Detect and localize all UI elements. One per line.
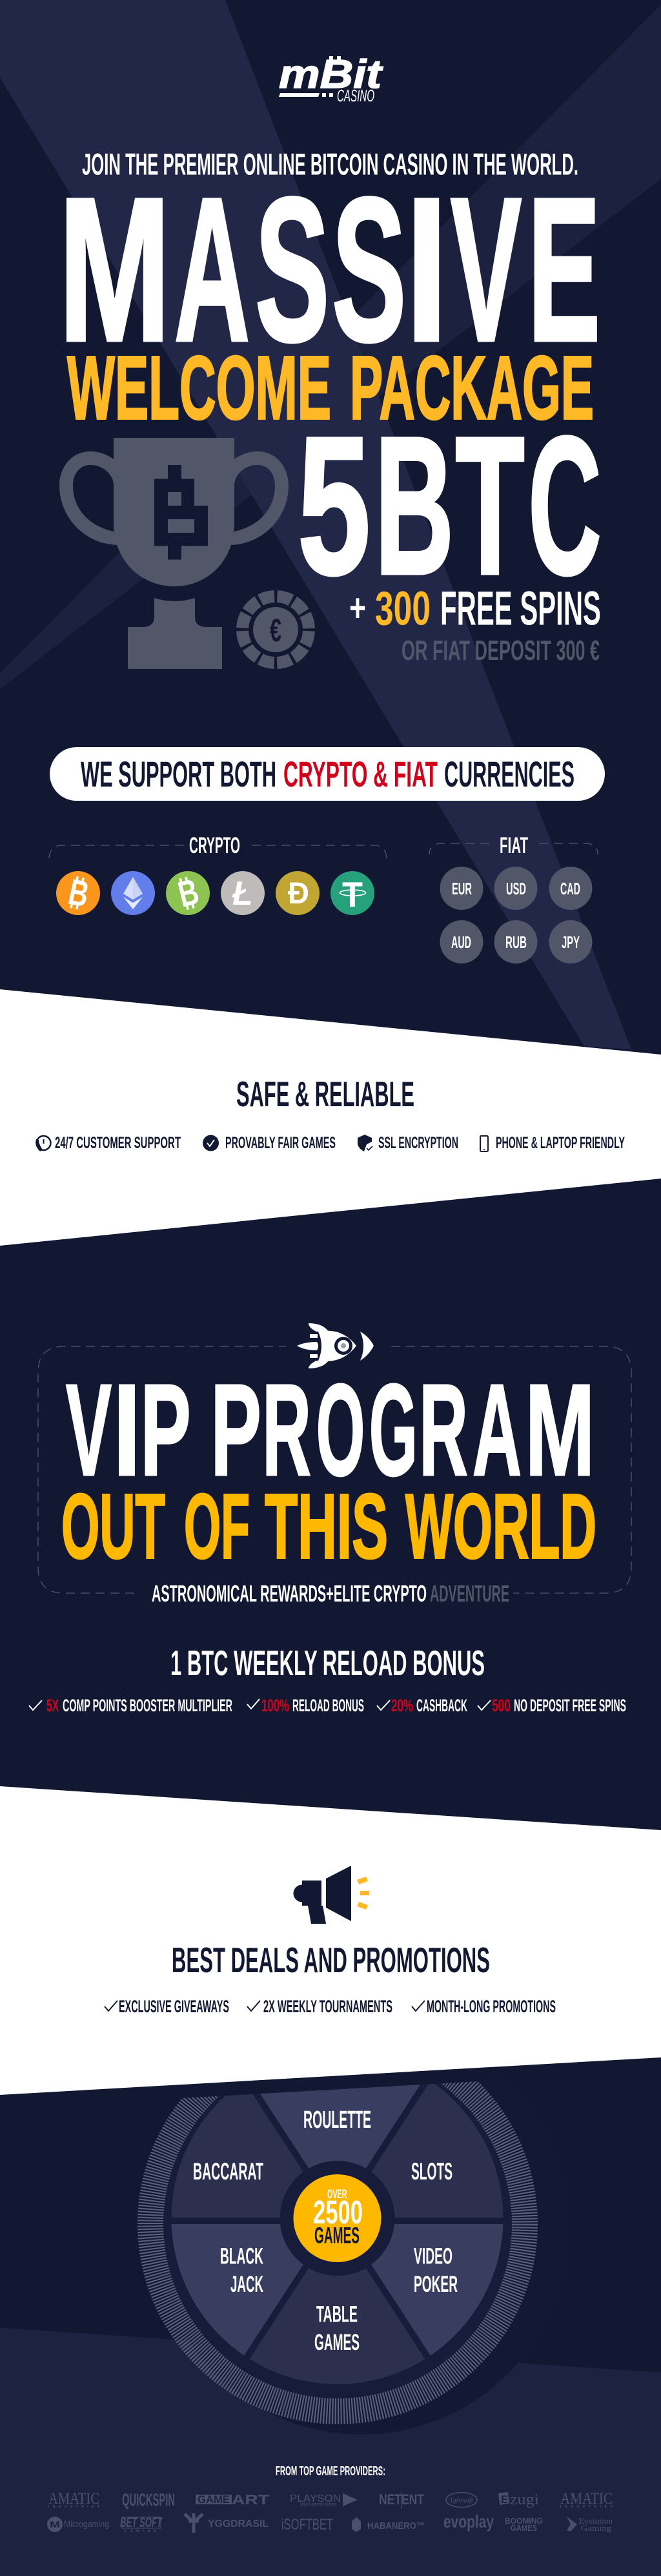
- logos: game providers: Igrosoft: [449, 2497, 474, 2504]
- heading: VIP program: G: [369, 1357, 418, 1503]
- logos: game providers: HABANERO™: [367, 2520, 425, 2531]
- panel: crypto: CRYPTO: [189, 833, 240, 858]
- feature row: VIP perks: 100%: [261, 1696, 289, 1715]
- logos: game providers: Gaming: [581, 2523, 612, 2533]
- feature row: safe and reliable: 24/7 CUSTOMER SUPPORT: [55, 1134, 181, 1152]
- icon: ethereum: [111, 871, 155, 915]
- icon: euro chip: €: [270, 612, 281, 648]
- free spins line: +: [349, 586, 366, 630]
- heading: massive: S: [332, 156, 406, 384]
- heading: 5BTC: 5: [298, 397, 371, 615]
- feature row: safe and reliable: [36, 1134, 625, 1152]
- heading: massive: M: [59, 156, 170, 384]
- pill: currencies banner: CRYPTO & FIAT: [283, 754, 438, 794]
- logos: game providers: YGGDRASIL: [208, 2519, 269, 2530]
- logos: game providers: GAME: [198, 2493, 230, 2506]
- panel: fiat: FIAT: [500, 833, 528, 858]
- heading: 5BTC: B: [375, 397, 454, 615]
- heading: out of this world: OUT: [61, 1475, 165, 1578]
- heading: VIP program: P: [141, 1357, 190, 1503]
- logos: game providers: M: [50, 2519, 60, 2530]
- heading: VIP program: A: [473, 1357, 522, 1503]
- feature row: VIP perks: RELOAD BONUS: [292, 1696, 364, 1715]
- chart: game wheel: BACCARAT: [193, 2158, 263, 2185]
- feature row: VIP perks: 500: [492, 1696, 511, 1715]
- chart: game wheel: [137, 2081, 538, 2435]
- panel: fiat: EUR: [452, 879, 472, 898]
- chart: game wheel: JACK: [230, 2272, 263, 2297]
- chart: game wheel: POKER: [414, 2272, 458, 2297]
- logos: game providers: QUICKSPIN: [122, 2490, 175, 2509]
- heading: VIP program: I: [113, 1357, 141, 1503]
- heading: VIP program: P: [210, 1357, 261, 1503]
- free spins line: [349, 581, 601, 635]
- panel: fiat: JPY: [562, 933, 580, 952]
- heading: 5BTC: T: [455, 397, 525, 615]
- icon: phone: [480, 1136, 488, 1151]
- feature row: VIP perks: 5X: [46, 1696, 59, 1715]
- icon: verified badge: [203, 1135, 219, 1151]
- logos: game providers: zugi: [510, 2491, 539, 2508]
- chart: game wheel: BLACK: [220, 2243, 263, 2269]
- logos: game providers: ART: [232, 2493, 269, 2508]
- white band: safe and reliable background: [0, 989, 661, 1246]
- icon: litecoin: Ł: [232, 875, 253, 912]
- logos: game providers: AMATIC: [48, 2490, 99, 2508]
- bottom lighter panel: [0, 2327, 661, 2576]
- logos: game providers: E: [501, 2493, 508, 2506]
- feature row: VIP perks: 20%: [391, 1696, 413, 1715]
- dashed frame: VIP: [38, 1346, 631, 1593]
- heading: massive: S: [255, 156, 329, 384]
- chart: game wheel: OVER: [327, 2188, 347, 2201]
- panel: fiat: CAD: [560, 879, 580, 898]
- icon: trophy with bitcoin: [59, 438, 289, 669]
- logos: game providers: GAMING: [124, 2530, 156, 2533]
- icon: litecoin: [221, 871, 265, 915]
- icon: bitcoin cash: B: [174, 871, 203, 914]
- heading: massive: V: [451, 156, 522, 384]
- icon: tether: T: [342, 874, 363, 914]
- icon: bitcoin: B: [65, 871, 92, 915]
- subtitle: rewards: ASTRONOMICAL REWARDS+ELITE CRYPTO: [152, 1580, 427, 1607]
- icon: dogecoin: Ð: [288, 876, 309, 910]
- heading: safe and reliable: SAFE & RELIABLE: [236, 1074, 414, 1114]
- chart: game wheel: 2500: [313, 2194, 363, 2231]
- icon: tether: [330, 871, 374, 915]
- feature row: VIP perks: COMP POINTS BOOSTER MULTIPLIER: [63, 1696, 232, 1715]
- background light ray: main diagonal: [0, 0, 631, 1049]
- heading: VIP program: R: [262, 1357, 311, 1503]
- logos: game providers: [47, 2490, 613, 2533]
- panel: fiat: RUB: [505, 933, 527, 952]
- feature row: VIP perks: [29, 1696, 626, 1715]
- heading: VIP program: V: [66, 1357, 112, 1503]
- logos: game providers: Microgaming: [64, 2519, 109, 2529]
- white band: deals background: [0, 1786, 661, 2095]
- pill: currencies banner: WE SUPPORT BOTH: [81, 754, 276, 794]
- free spins line: 300: [375, 581, 431, 635]
- icon: dogecoin: [276, 871, 320, 915]
- feature row: promotions: EXCLUSIVE GIVEAWAYS: [119, 1997, 229, 2016]
- heading: VIP program: O: [316, 1357, 365, 1503]
- logos: game providers: Evolution: [579, 2516, 613, 2526]
- panel: crypto: [49, 833, 387, 915]
- logos: game providers: evoplay: [443, 2511, 494, 2531]
- heading: welcome package: WELCOME: [67, 337, 331, 438]
- feature row: promotions: 2X WEEKLY TOURNAMENTS: [263, 1997, 392, 2016]
- chart: game wheel: SLOTS: [411, 2158, 453, 2185]
- icon: euro chip: [243, 597, 309, 663]
- chart: game wheel: VIDEO: [414, 2243, 453, 2269]
- logos: game providers: AMATIC: [560, 2490, 613, 2508]
- feature row: safe and reliable: PROVABLY FAIR GAMES: [225, 1134, 336, 1152]
- logos: game providers: BET SOFT: [120, 2515, 163, 2530]
- icon: phone clock: [36, 1136, 50, 1151]
- icon: megaphone: [293, 1866, 369, 1924]
- heading: out of this world: [61, 1475, 596, 1578]
- heading: out of this world: OF: [184, 1475, 250, 1578]
- logos: game providers: GAMES: [511, 2523, 537, 2533]
- logo: mBit Casino: mBit: [279, 52, 383, 97]
- heading: VIP program: M: [525, 1357, 595, 1503]
- logos: game providers: BOOMING: [505, 2516, 543, 2526]
- heading: providers: FROM TOP GAME PROVIDERS:: [276, 2464, 385, 2478]
- logos: game providers: INDUSTRIES: [560, 2505, 613, 2509]
- feature row: promotions: [105, 1997, 556, 2016]
- logos: game providers: unique gaming solutions: [300, 2502, 336, 2507]
- logo: mBit Casino: CASINO: [337, 86, 374, 105]
- heading: VIP program: R: [419, 1357, 468, 1503]
- chart: game wheel: ROULETTE: [303, 2107, 371, 2134]
- logos: game providers: PLAYSON: [290, 2493, 341, 2504]
- heading: out of this world: THIS: [265, 1475, 388, 1578]
- feature row: VIP perks: CASHBACK: [416, 1696, 467, 1715]
- pill: currencies banner: [50, 747, 605, 801]
- subtitle: rewards: ADVENTURE: [430, 1580, 509, 1607]
- chart: game wheel: GAMES: [314, 2223, 360, 2249]
- heading: massive: A: [174, 156, 250, 384]
- panel: fiat: USD: [506, 879, 526, 898]
- logos: game providers: NETENT: [379, 2491, 424, 2508]
- background light ray: faint diagonal: [0, 5, 661, 689]
- panel: fiat: AUD: [451, 933, 471, 952]
- feature row: safe and reliable: SSL ENCRYPTION: [378, 1134, 458, 1152]
- logos: game providers: iSOFTBET: [281, 2516, 333, 2533]
- heading: massive: I: [405, 156, 448, 384]
- icon: shield: [358, 1135, 372, 1151]
- heading: massive: E: [528, 156, 600, 384]
- panel: fiat: [429, 833, 598, 963]
- chart: game wheel: GAMES: [314, 2330, 360, 2355]
- logos: game providers: INDUSTRIES: [48, 2505, 100, 2509]
- icon: rocket: [297, 1323, 374, 1368]
- chart: game wheel: TABLE: [316, 2302, 358, 2327]
